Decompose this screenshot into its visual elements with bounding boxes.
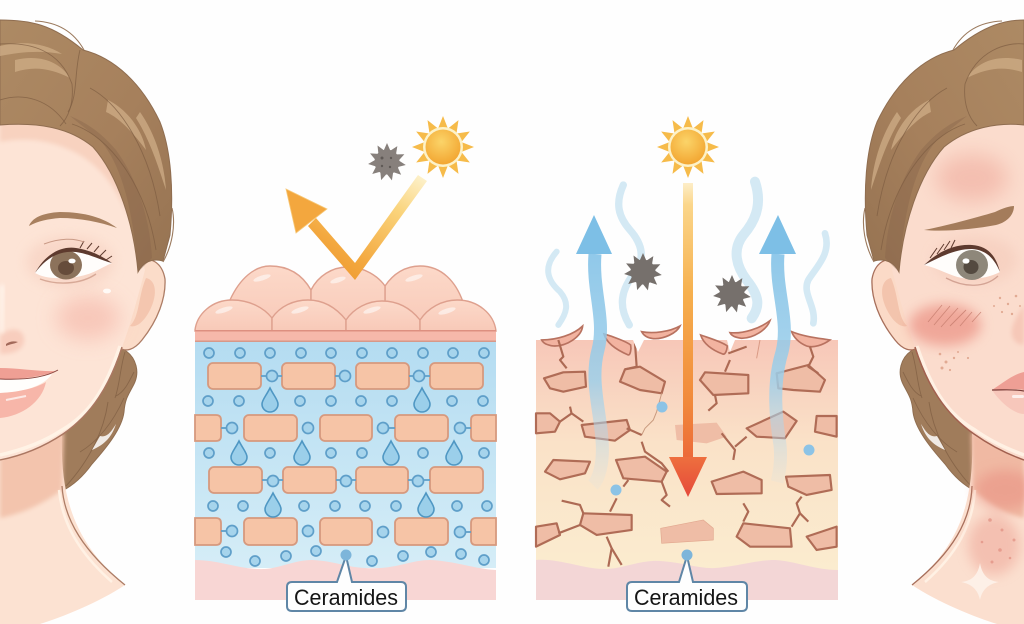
ceramides callout: Ceramides	[634, 585, 738, 610]
ceramide dots	[203, 348, 492, 566]
rising moisture wisps	[548, 182, 827, 325]
smiling mouth	[0, 368, 58, 418]
sun	[412, 116, 474, 178]
neck shadow	[0, 432, 64, 518]
neck	[912, 430, 1024, 624]
hair mass	[863, 20, 1024, 272]
sparkle	[961, 563, 999, 600]
hair mass	[0, 20, 172, 272]
jaw rim	[0, 346, 120, 455]
lower dermis	[195, 560, 496, 600]
bun hair	[900, 348, 977, 491]
face skin	[892, 110, 1024, 460]
reflected sun arrow	[286, 175, 427, 280]
nose	[1012, 305, 1024, 345]
surface flakes	[542, 321, 830, 355]
pollution particle right	[713, 275, 751, 313]
white mark	[103, 289, 111, 293]
pollution particle	[368, 143, 406, 181]
neck rash dots	[981, 518, 1016, 564]
sun	[657, 116, 719, 178]
face skin	[0, 110, 145, 460]
forehead shade	[0, 115, 145, 270]
frowning eyebrow	[924, 206, 1014, 231]
water drops	[231, 388, 462, 517]
cheek redness	[909, 304, 981, 346]
ear	[872, 260, 917, 350]
hydrated water layer	[195, 342, 496, 568]
cracked skin base	[536, 340, 838, 570]
tense mouth	[992, 372, 1024, 414]
lower dermis	[536, 560, 838, 600]
ear	[120, 260, 165, 350]
white crack gaps	[633, 340, 735, 352]
front skin bumps	[195, 300, 496, 331]
right irritated face	[863, 20, 1024, 624]
healthy skin panel	[195, 116, 496, 611]
hair shadows and strands	[70, 116, 152, 272]
ceramides callout: Ceramides	[294, 585, 398, 610]
eye socket shade	[933, 236, 1017, 284]
eye socket shade	[26, 236, 114, 288]
ceramides callout	[627, 550, 747, 611]
hair flyaway	[35, 21, 174, 262]
damaged skin panel	[536, 116, 838, 611]
eye	[35, 239, 112, 283]
eye	[924, 240, 1000, 285]
moisture escaping arrows	[576, 215, 796, 485]
jaw outline	[0, 347, 122, 460]
cell bricks	[195, 363, 496, 545]
back skin bumps	[230, 266, 463, 330]
penetrating sun arrow	[669, 183, 707, 497]
bump highlights	[215, 273, 456, 316]
skin cracks and broken cells	[536, 340, 837, 567]
lipid connectors	[221, 376, 471, 532]
neck redness	[968, 470, 1024, 575]
nose	[0, 285, 24, 354]
freckles	[939, 295, 1021, 371]
bun hair	[60, 348, 137, 491]
skin surface band	[195, 330, 496, 342]
forehead redness	[936, 154, 1008, 202]
cheek blush	[56, 296, 120, 340]
neck outline	[62, 486, 125, 585]
neck	[0, 430, 125, 624]
ceramides callout	[287, 550, 406, 611]
scattered ceramide dots	[610, 402, 814, 496]
pollution particle left	[624, 253, 662, 291]
left healthy face	[0, 20, 174, 624]
eyebrow	[29, 212, 117, 228]
hair highlights	[0, 43, 166, 190]
cheek irritation hatching	[928, 305, 981, 327]
